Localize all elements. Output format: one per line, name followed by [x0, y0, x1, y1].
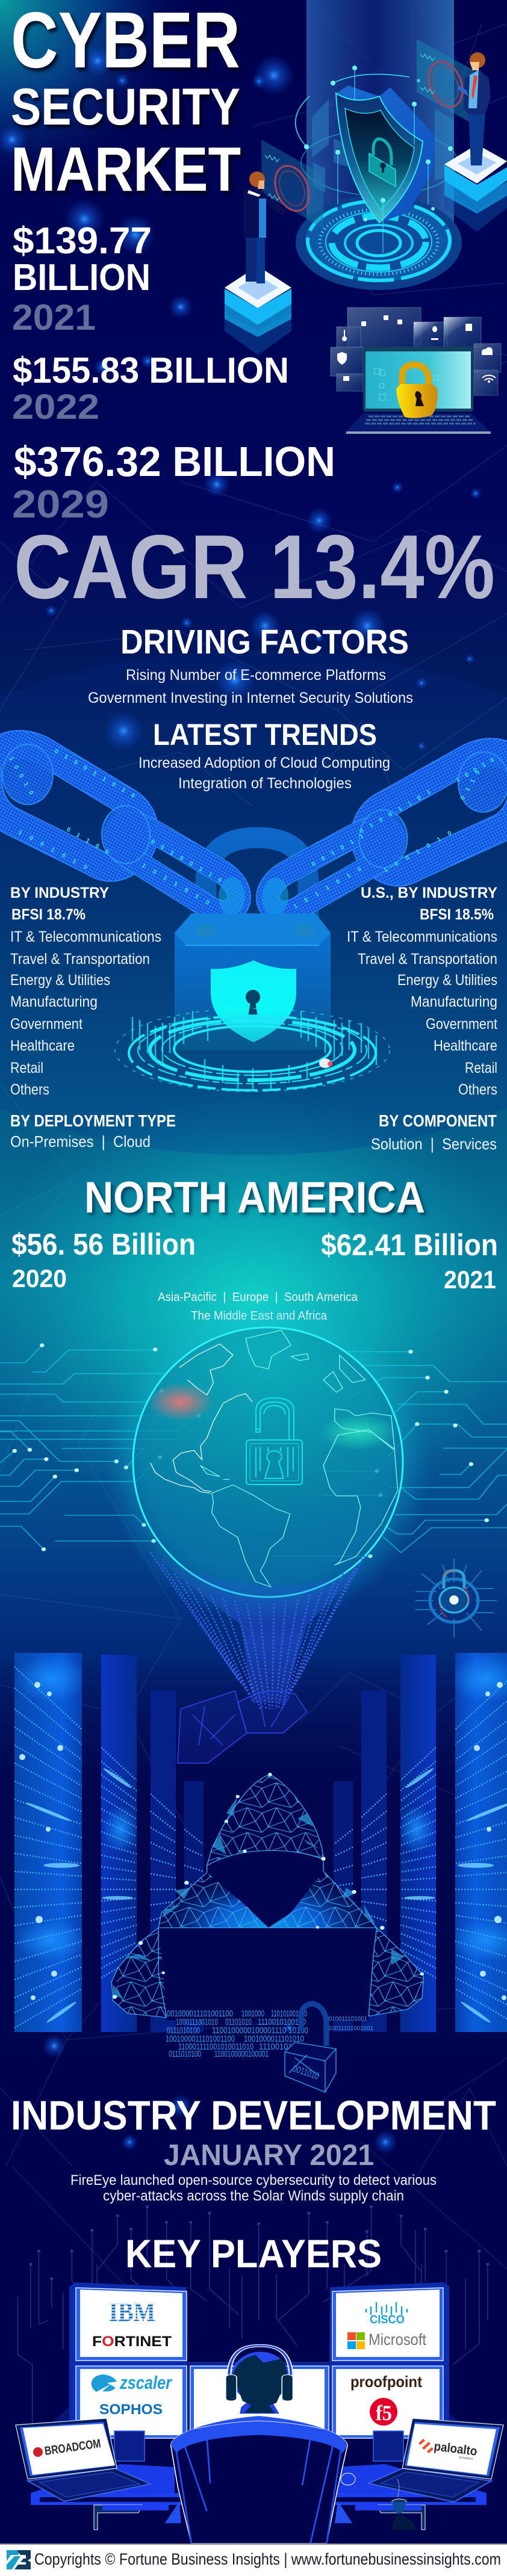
driving factors: Government Investing in Internet Security Solutions — [88, 690, 413, 706]
footer logo — [7, 2550, 31, 2569]
monitor stands — [114, 2431, 403, 2461]
other regions: The Middle East and Africa — [191, 1309, 328, 1323]
segment list: by industry: IT & Telecommunications — [10, 928, 161, 945]
chain binary digits: 1 0 0 1 0 — [7, 756, 36, 798]
logo: Palo Alto: paloalto — [433, 2439, 478, 2459]
left chain — [0, 744, 245, 916]
other regions — [158, 1291, 358, 1323]
north america heading: NORTH AMERICA — [84, 1173, 425, 1222]
stat: 2029 market size: $376.32 BILLION — [14, 438, 335, 485]
segment list: U.S. by industry: BFSI 18.5% — [420, 906, 494, 923]
data beam — [151, 1552, 367, 1763]
chain binary digits: 0 0 1 0 0 1 1 0 — [149, 838, 225, 886]
segment list: U.S. by industry: Retail — [465, 1060, 497, 1076]
logo: Cisco — [366, 2302, 407, 2326]
latest trends: LATEST TRENDS — [153, 718, 377, 752]
desk — [31, 2464, 487, 2530]
right chain — [261, 744, 507, 925]
binary stream: 1001000011101001100 — [166, 2034, 235, 2044]
segment list: U.S. by industry: U.S., BY INDUSTRY — [361, 885, 497, 901]
chain binary digits: 1 0 0 1 0 1 0 — [17, 829, 92, 873]
logo: Microsoft: Microsoft — [369, 2330, 426, 2349]
binary stream: 10011101001001 — [328, 2025, 373, 2032]
chain and padlock illustration: 1 0 0 1 0 1 0 — [383, 828, 456, 874]
circuit padlock — [246, 1398, 302, 1484]
wave glyphs on panels — [265, 54, 435, 200]
stat: 2022 market size — [12, 350, 289, 427]
chain binary digits — [7, 748, 225, 908]
segment list: U.S. by industry: Healthcare — [434, 1037, 497, 1054]
binary stream: 0111010100 — [167, 2025, 200, 2036]
logo: Palo Alto — [418, 2439, 478, 2460]
driving factors: Rising Number of E-commerce Platforms — [126, 667, 386, 684]
title: MARKET — [11, 135, 241, 205]
shield padlock — [369, 139, 396, 187]
segment list: by industry: Travel & Transportation — [10, 951, 150, 968]
logo: Proofpoint: proofpoint — [350, 2373, 422, 2391]
logo: F5: f5 — [376, 2401, 392, 2425]
stat: 2022 market size: 2022 — [12, 388, 99, 427]
panel icons — [337, 315, 493, 383]
logo: Sophos: SOPHOS — [99, 2401, 163, 2418]
small circuit padlock — [415, 1558, 497, 1638]
holographic ring arcs — [296, 74, 458, 196]
logo: Broadcom: BROADCOM — [44, 2437, 102, 2458]
logo: Fortinet: FORTINET — [92, 2334, 172, 2350]
stat: 2029 market size — [12, 438, 335, 526]
operator in chair — [165, 2346, 352, 2544]
segment: by deployment type — [10, 1111, 176, 1151]
chain and padlock illustration: 1 0 0 1 0 — [455, 756, 497, 784]
segment list: by industry: BFSI 18.7% — [11, 906, 86, 923]
stat: north america 2020: 2020 — [12, 1264, 67, 1293]
right man — [458, 52, 491, 165]
left laptop — [16, 2418, 151, 2501]
right data panel — [417, 39, 474, 125]
stat: 2021 market size: BILLION — [13, 257, 151, 298]
stat: 2029 market size: 2029 — [12, 482, 109, 526]
glowing rings — [115, 1008, 390, 1092]
shield — [336, 85, 435, 223]
stat: north america 2020 — [11, 1228, 196, 1293]
segment list: by industry: Manufacturing — [10, 993, 98, 1010]
stat: 2022 market size: $155.83 BILLION — [13, 350, 289, 391]
laptop screen — [363, 347, 473, 412]
stat: 2021 market size: 2021 — [12, 297, 96, 338]
logo: IBM: IBM — [109, 2297, 155, 2327]
logo: Cisco: CISCO — [370, 2314, 405, 2326]
red rings — [269, 57, 469, 216]
chair — [165, 2416, 352, 2544]
chain and padlock illustration: 0 1 0 0 1 1 0 1 — [359, 788, 435, 835]
segment: by component — [371, 1111, 497, 1153]
segment list: by industry: Retail — [10, 1060, 43, 1076]
hacker figure — [111, 1771, 427, 2021]
binary stream: 1001000011101010 — [244, 2034, 304, 2044]
segment list: U.S. by industry: Government — [426, 1016, 497, 1033]
binary stream: 1100100000100001 — [214, 2049, 269, 2059]
binary stream: 1110010100 — [259, 2042, 301, 2052]
segment list: U.S. by industry: Manufacturing — [411, 993, 497, 1010]
binary stream: 1100100000100001110 10100 — [212, 2025, 308, 2036]
stat: north america 2021 — [321, 1228, 498, 1294]
laptop base — [346, 413, 490, 431]
monitor light cones — [30, 2407, 488, 2443]
logo: Microsoft — [347, 2330, 426, 2349]
binary stream: 0111010100 — [169, 2049, 201, 2059]
left data panel — [261, 140, 323, 229]
circuit backdrop — [18, 2205, 489, 2427]
light column — [306, 0, 454, 223]
latest trends: Integration of Technologies — [178, 775, 352, 792]
logo: Zscaler — [92, 2372, 173, 2393]
binary stream: 1110010100110 — [258, 2017, 306, 2027]
industry development: cyber-attacks across the Solar Winds supply chain — [103, 2188, 404, 2204]
segment: by deployment type: BY DEPLOYMENT TYPE — [10, 1111, 176, 1130]
laptop and floating security panels — [331, 307, 501, 434]
top illustration: cyber shield scene — [225, 0, 507, 355]
latest trends — [138, 718, 390, 792]
mesh padlock small — [285, 2004, 336, 2092]
chain and padlock illustration: 0 1 1 0 — [459, 767, 483, 802]
chain and padlock illustration: 1 0 1 1 0 1 0 — [293, 864, 365, 910]
chain ring — [2, 744, 53, 805]
driving factors: DRIVING FACTORS — [120, 623, 409, 661]
stat: north america 2021: 2021 — [444, 1265, 496, 1294]
server racks — [14, 1653, 507, 2032]
industry development — [11, 2092, 496, 2204]
segment list: U.S. by industry: Others — [458, 1081, 497, 1098]
segment list: by industry: Healthcare — [10, 1037, 75, 1054]
segment list: by industry: Government — [10, 1016, 82, 1033]
stat: 2021 market size — [12, 220, 152, 338]
mesh padlock base — [178, 1691, 307, 1763]
gold padlock — [396, 365, 438, 418]
binary stream: 001000011101001100 — [167, 2009, 233, 2019]
globe — [105, 1300, 431, 1625]
segment: by component: Solution | Services — [371, 1135, 497, 1153]
binary stream: 01101010 — [225, 2017, 252, 2027]
footer — [0, 2544, 507, 2576]
background translucent panels — [312, 99, 454, 193]
logo: F5 — [370, 2398, 397, 2426]
chain and padlock illustration: 0 0 1 0 1 1 — [311, 832, 367, 868]
monitor wall — [69, 2282, 449, 2438]
driving factors — [88, 623, 413, 706]
binary stream: 1010011101001 — [325, 2016, 367, 2022]
segment list: by industry: Others — [10, 1081, 49, 1098]
title: SECURITY — [11, 78, 240, 136]
left platform — [225, 266, 291, 355]
latest trends: Increased Adoption of Cloud Computing — [138, 755, 390, 771]
segment list: U.S. by industry — [347, 885, 497, 1098]
target disc — [296, 195, 462, 290]
binary stream — [166, 2009, 373, 2059]
title — [11, 0, 241, 205]
mouse — [341, 2473, 355, 2485]
logo: Broadcom — [33, 2437, 102, 2458]
right platform — [444, 144, 507, 232]
segment: by deployment type: On-Premises | Cloud — [10, 1132, 151, 1151]
monitor frames — [76, 2288, 443, 2438]
chain binary digits: 1 0 1 1 0 1 0 — [141, 862, 214, 908]
binary stream: 110101001110 — [271, 2009, 307, 2019]
other regions: Asia-Pacific | Europe | South America — [158, 1291, 358, 1304]
stat: 2021 market size: $139.77 — [13, 220, 152, 262]
mesh padlock small: 0011010 — [291, 2064, 320, 2082]
industry development: FireEye launched open-source cybersecurity to detect various — [70, 2172, 437, 2188]
glow nodes — [304, 66, 453, 221]
padlock body — [175, 913, 331, 1050]
segment list: by industry — [10, 885, 161, 1098]
logo: Palo Alto: NETWORKS — [459, 2456, 473, 2460]
chain binary digits: 0 1 1 0 0 — [65, 826, 113, 857]
industry development: JANUARY 2021 — [164, 2139, 374, 2172]
continents — [151, 1330, 398, 1587]
logo: Zscaler: zscaler — [119, 2372, 173, 2393]
circuit traces — [0, 1344, 507, 1558]
padlock shield — [211, 960, 296, 1042]
binary stream: 110001111001010011010 — [178, 2042, 254, 2052]
key players heading: KEY PLAYERS — [125, 2231, 382, 2276]
chain and padlock illustration — [0, 744, 507, 1092]
operator head — [226, 2346, 293, 2414]
chain binary digits: 0 1 0 0 1 1 0 1 0 — [53, 748, 138, 801]
coffee cup — [392, 2479, 415, 2530]
stat: north america 2020: $56. 56 Billion — [11, 1228, 196, 1261]
segment list: by industry: Energy & Utilities — [10, 972, 110, 989]
padlock shackle — [206, 838, 308, 931]
monitor screens — [80, 2290, 440, 2435]
right laptop — [369, 2418, 503, 2502]
floating panels — [331, 307, 501, 395]
binary stream: 1001000 — [241, 2009, 264, 2019]
segment list: by industry: BY INDUSTRY — [10, 885, 109, 901]
left man — [243, 171, 286, 283]
workstation illustration — [16, 2282, 503, 2544]
binary stream: 1000111001010 — [176, 2017, 218, 2027]
